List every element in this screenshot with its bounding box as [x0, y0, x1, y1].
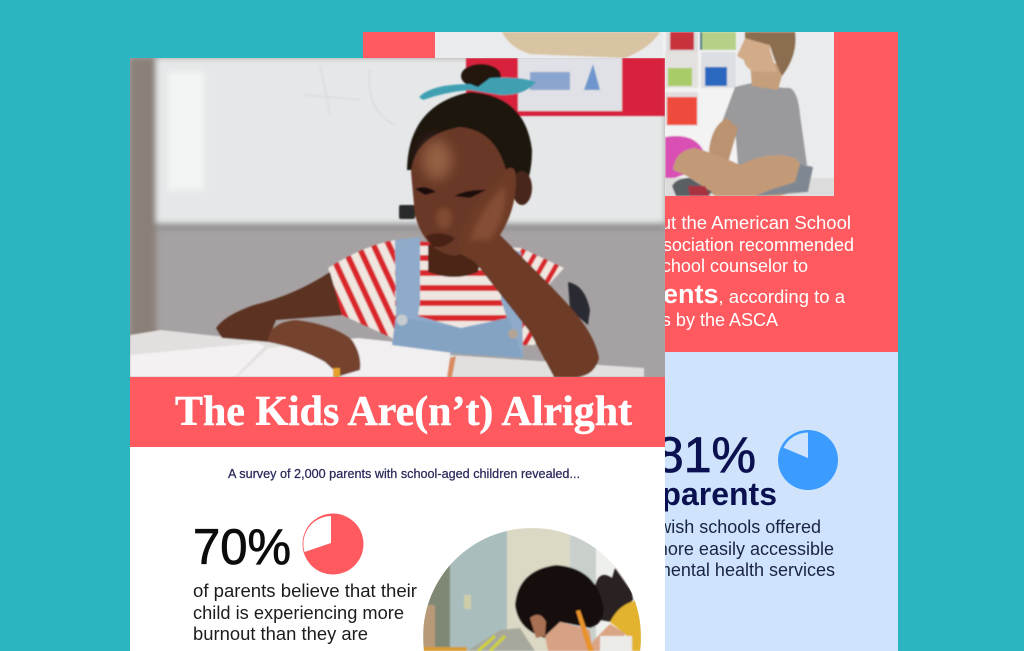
- eyes, mouth: [415, 187, 436, 195]
- stat: 81% of parents: wish schools offered: [657, 517, 821, 537]
- banner: title: The Kids Are(n’t) Alright: [175, 389, 632, 435]
- hair: [406, 91, 533, 176]
- text: counselor recommendation: [553, 212, 854, 330]
- text: counselor recommendation: 250 students, according to a: [553, 279, 846, 309]
- stat: 81% of parents: 81%: [656, 427, 756, 483]
- shirt: [722, 83, 807, 165]
- neck and head: [750, 62, 785, 90]
- stat: 81% of parents: [622, 427, 835, 580]
- photo: bored girl at desk: [130, 58, 665, 377]
- text: counselor recommendation: Counselor Association recommended: [556, 235, 854, 255]
- far arm: [216, 272, 342, 342]
- panel: front page: [130, 58, 665, 651]
- hoodie: [467, 628, 535, 651]
- text: counselor recommendation: But the American School: [648, 212, 851, 233]
- photo: boy writing with pencil: [423, 528, 642, 651]
- hand on book: [268, 320, 360, 376]
- other child: [594, 568, 633, 622]
- subtitle: A survey of 2,000 parents with school-aged children revealed...: [228, 467, 580, 481]
- photo: boy sitting cross-legged: [435, 32, 835, 196]
- desk: [130, 330, 644, 377]
- stat: 70% of parents: of parents believe that their: [193, 581, 417, 601]
- banner: title: [130, 377, 665, 447]
- overall buttons: [396, 314, 408, 326]
- pie chart: 70%: [302, 514, 364, 574]
- book: [130, 343, 265, 377]
- bow: [419, 78, 536, 100]
- boy head: [515, 565, 604, 638]
- stat: 81% of parents: more easily accessible: [653, 539, 834, 559]
- chair: [568, 282, 590, 325]
- stat: 70% of parents: child is experiencing more: [193, 603, 404, 623]
- legs: [673, 148, 804, 196]
- ear: [512, 171, 532, 205]
- pie chart: 81%: [778, 430, 838, 490]
- stat: 81% of parents: mental health services: [656, 560, 835, 580]
- overalls: [392, 237, 523, 358]
- arm: [708, 118, 738, 160]
- stat: 70% of parents: 70%: [193, 519, 291, 575]
- shirt: [328, 240, 564, 346]
- face: [411, 127, 510, 256]
- hand and raised arm: [458, 168, 599, 377]
- panel: back page: [363, 32, 898, 651]
- neck: [427, 244, 480, 278]
- stat: 70% of parents: [193, 519, 417, 644]
- stat: 70% of parents: burnout than they are: [193, 624, 368, 644]
- text: counselor recommendation: 2019 analysis by the ASCA: [561, 310, 778, 330]
- stat: 81% of parents: of parents: [622, 476, 777, 512]
- text: counselor recommendation: one school counselor to: [618, 256, 808, 276]
